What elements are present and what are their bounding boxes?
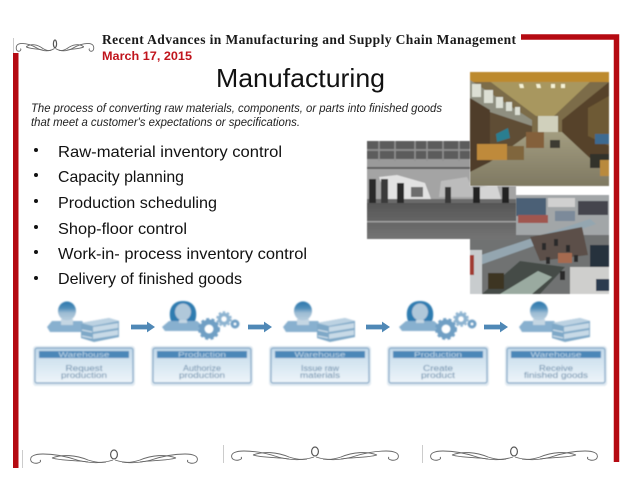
step 3: issue raw materials: materials bbox=[300, 371, 340, 380]
ornaments: bottom row bbox=[22, 445, 597, 468]
step 2: authorize production: Authorize bbox=[183, 364, 222, 373]
step 3: issue raw materials: Issue raw bbox=[301, 364, 339, 373]
photo: warehouse bbox=[470, 72, 609, 186]
step 5: receive finished goods: finished goods bbox=[524, 371, 588, 380]
step 5: receive finished goods: Receive bbox=[539, 364, 574, 373]
ornament: top left bbox=[13, 38, 94, 53]
arrow 3 bbox=[366, 322, 390, 332]
process flow diagram bbox=[33, 301, 607, 386]
bullet list: Delivery of finished goods bbox=[58, 271, 242, 288]
step 4: create product: product bbox=[421, 371, 456, 380]
step 4: create product bbox=[387, 301, 489, 386]
definition text: The process of converting raw materials, components, or parts into finished goods bbox=[31, 103, 442, 115]
bullet list: Raw-material inventory control bbox=[58, 144, 282, 161]
definition text bbox=[31, 103, 442, 129]
right red border bbox=[521, 37, 616, 462]
bullet list: Shop-floor control bbox=[58, 221, 187, 238]
step 4: create product: Create bbox=[423, 364, 454, 373]
header title: Recent Advances in Manufacturing and Supply Chain Management bbox=[102, 32, 516, 47]
step 1: request production bbox=[33, 302, 135, 386]
bullet list bbox=[34, 144, 307, 288]
step 5: receive finished goods: Warehouse bbox=[530, 352, 582, 359]
heading: Manufacturing bbox=[216, 63, 385, 93]
step 1: request production: Warehouse bbox=[58, 352, 110, 359]
step 4: create product: Production bbox=[414, 352, 462, 359]
step 1: request production: production bbox=[61, 371, 107, 380]
photo: black and white assembly line bbox=[367, 141, 516, 239]
definition text: that meet a customer's expectations or specifications. bbox=[31, 117, 300, 129]
arrow 4 bbox=[484, 322, 508, 332]
step 5: receive finished goods bbox=[505, 302, 607, 386]
step 1: request production: Request bbox=[66, 364, 103, 373]
bullet list: Production scheduling bbox=[58, 195, 217, 212]
arrow 2 bbox=[248, 322, 272, 332]
step 2: authorize production bbox=[151, 301, 253, 386]
bullet list: Work-in- process inventory control bbox=[58, 246, 307, 263]
step 3: issue raw materials: Warehouse bbox=[294, 352, 346, 359]
step 2: authorize production: Production bbox=[178, 352, 226, 359]
header date: March 17, 2015 bbox=[102, 49, 192, 63]
photo: assembly floor bbox=[470, 195, 609, 294]
left red border bbox=[13, 53, 18, 468]
step 2: authorize production: production bbox=[179, 371, 225, 380]
bullet list: Capacity planning bbox=[58, 169, 184, 186]
arrow 1 bbox=[131, 322, 155, 332]
step 3: issue raw materials bbox=[269, 302, 371, 386]
